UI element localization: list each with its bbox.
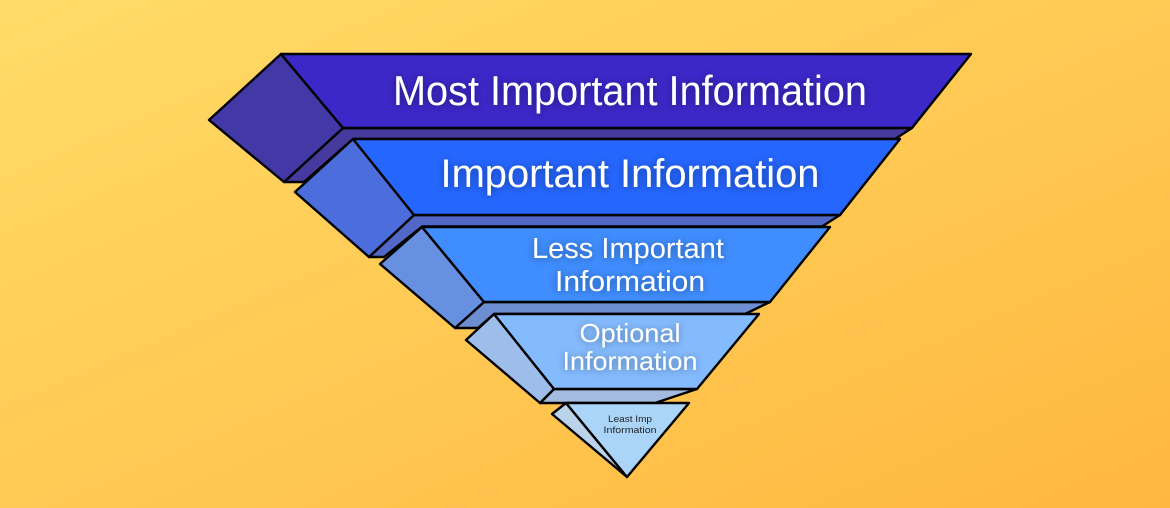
tier 5: least important [552, 403, 689, 477]
tier 2: important: Important Information [440, 152, 820, 196]
tier 3: less important: Information [555, 266, 705, 298]
tier 4: optional: Information [562, 346, 698, 376]
tier 3: less important [380, 227, 830, 328]
tier 4: optional [466, 314, 759, 403]
tier 1: most important: Most Important Information [393, 67, 867, 114]
tier 5: least important: Information [604, 425, 656, 436]
tier 1: most important [209, 54, 971, 182]
tier 2: important [295, 139, 900, 257]
tier 5: least important: Least Imp [608, 414, 652, 425]
tier 4: optional: Optional [580, 318, 680, 348]
tier 3: less important: Less Important [532, 233, 724, 265]
